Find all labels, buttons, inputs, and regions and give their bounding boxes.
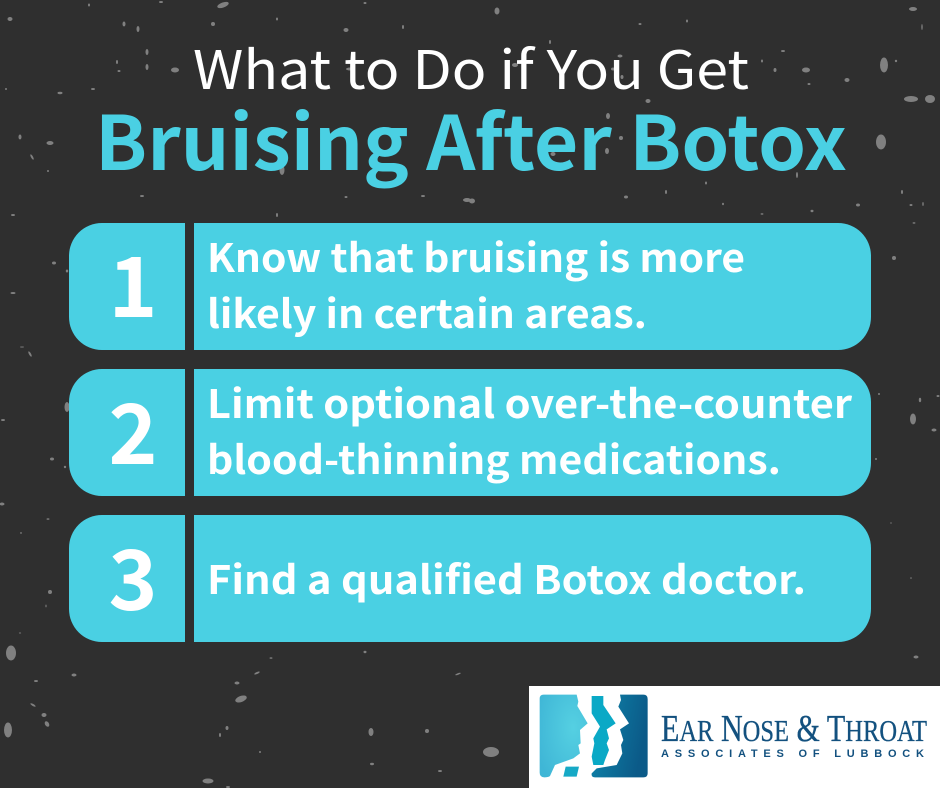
icon: three face profiles — [540, 695, 648, 777]
number tab 2 — [69, 369, 185, 496]
title line 1: What to Do if You Get — [193, 29, 749, 105]
step 2 text line 1: Limit optional over-the-counter — [207, 374, 853, 430]
logo: Ear Nose & Throat Associates of Lubbock — [529, 686, 940, 788]
panel: step 1 — [69, 221, 871, 350]
logo wordmark: EAR NOSE & THROAT — [661, 708, 927, 750]
number 1: 1 — [109, 221, 157, 341]
text bar 2 — [194, 369, 871, 496]
title line 2: Bruising After Botox — [95, 83, 847, 192]
text bar 3 — [194, 515, 871, 642]
panel: step 2 — [69, 368, 871, 496]
number tab 1 — [69, 223, 185, 350]
step 3 text: Find a qualified Botox doctor. — [207, 550, 806, 606]
number tab 3 — [69, 515, 185, 642]
number 3: 3 — [109, 514, 157, 634]
step 1 text line 1: Know that bruising is more — [207, 228, 745, 284]
logo tagline: ASSOCIATES OF LUBBOCK — [661, 748, 924, 760]
number 2: 2 — [109, 368, 157, 488]
step 1 text line 2: likely in certain areas. — [207, 284, 647, 340]
text bar 1 — [194, 223, 871, 350]
panel: step 3 — [69, 514, 871, 642]
step 2 text line 2: blood-thinning medications. — [207, 430, 781, 486]
